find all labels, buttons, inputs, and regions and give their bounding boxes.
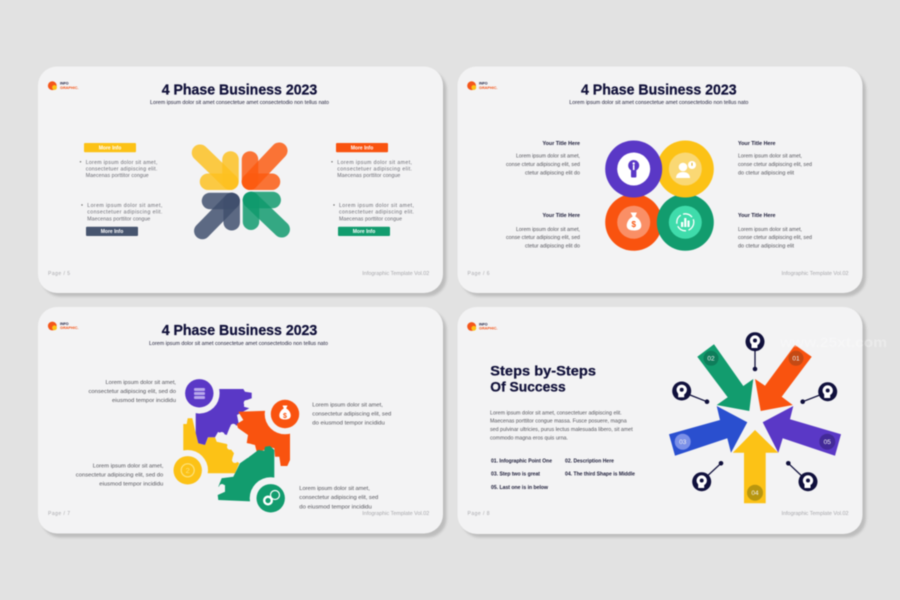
- logo: INFO: [479, 322, 488, 326]
- title: 4 Phase Business 2023: [581, 82, 737, 98]
- button: navy more info: [86, 227, 138, 236]
- text: top left: [88, 380, 177, 404]
- text: bottom right: Lorem ipsum dolor sit amet,: [299, 486, 370, 492]
- heading: Of Success: [490, 379, 566, 395]
- icon: pin top: [746, 332, 764, 371]
- footer: template name: Infographic Template Vol.02: [362, 511, 430, 517]
- text: bullet bottom left: Lorem ipsum dolor sit amet,: [87, 203, 162, 209]
- subtitle: Lorem ipsum dolor sit amet consectetue amet consectetodio non tellus nato: [149, 341, 328, 347]
- button: green more info: [338, 227, 390, 236]
- text: bottom left: [506, 213, 580, 250]
- list: points: 01. Infographic Point One: [491, 458, 552, 464]
- text: bullet bottom right: Maecenas porttitor congue: [339, 216, 402, 222]
- text: bullet bottom right: consectetuer adipiscing elit.: [339, 210, 414, 216]
- icon: pin lower right: [786, 461, 818, 491]
- button: yellow more info: More Info: [99, 146, 121, 152]
- text: bullet bottom right: Lorem ipsum dolor sit amet,: [339, 203, 414, 209]
- arrow: 05 purple: 05: [824, 439, 831, 446]
- text: top right: [738, 141, 812, 177]
- text: bottom right: consectetur adipiscing elit, sed: [299, 495, 378, 501]
- text: top left: eiusmod tempor incididu: [112, 398, 176, 404]
- piece: yellow: [183, 418, 239, 473]
- arrow: 01 orange: 01: [792, 356, 800, 363]
- title: 4 Phase Business 2023: [162, 323, 317, 339]
- button: orange more info: [336, 143, 388, 152]
- text: bullet top right: consectetuer adipiscing elit.: [337, 166, 412, 172]
- text: top left: Lorem ipsum dolor sit amet,: [106, 380, 177, 386]
- text: bullet bottom left: [81, 203, 162, 222]
- list: points: 05. Last one is in below: [491, 485, 549, 491]
- arrow: 04 yellow: [733, 430, 778, 503]
- arrow: 03 blue: 03: [679, 439, 687, 446]
- footer: page number: Page / 5: [48, 271, 70, 277]
- button: yellow more info: [84, 143, 136, 152]
- button: navy more info: More Info: [101, 229, 123, 235]
- text: description: Lorem ipsum dolor sit amet, consectetuer adipiscing elit.: [490, 410, 622, 416]
- text: bottom left: [76, 464, 164, 488]
- text: description: sed pulvinar ultricies, purus lectus malesuada libero, sit amet: [490, 427, 633, 433]
- arrow: 02 green: [697, 344, 753, 411]
- text: top right: Lorem ipsum dolor sit amet,: [312, 403, 383, 409]
- logo: [48, 322, 78, 330]
- text: top right: Lorem ipsum dolor sit amet,: [738, 154, 802, 160]
- text: bullet top left: consectetuer adipiscing elit.: [86, 166, 157, 172]
- text: bottom right: conse ctetur adipiscing elit, sed: [738, 235, 812, 241]
- icon: orange money bag: [271, 400, 299, 428]
- text: top right: consectetur adipiscing elit, sed: [312, 412, 391, 418]
- footer: page number: Page / 6: [468, 271, 490, 277]
- text: bottom right: [738, 213, 812, 250]
- heading: Steps by-Steps: [490, 363, 596, 379]
- arrow: orange: [250, 151, 279, 182]
- chart: four inward arrows: [200, 151, 282, 231]
- list: points: 04. The third Shape is Middle: [565, 472, 635, 478]
- text: top left: consectetur adipiscing elit, sed do: [88, 389, 176, 395]
- panel: slide 6 circles: [458, 66, 866, 296]
- text: top left: Lorem ipsum dolor sit amet,: [516, 154, 580, 160]
- arrow: 03 blue: [669, 406, 747, 456]
- text: top left: ctetur adipiscing elit do: [525, 171, 580, 177]
- subtitle: Lorem ipsum dolor sit amet consectetue amet consectetodio non tellus nato: [569, 100, 748, 106]
- arrow: 01 orange: [755, 345, 812, 411]
- arrow: 05 purple: [763, 406, 841, 456]
- text: bullet top left: Lorem ipsum dolor sit amet,: [86, 160, 157, 166]
- text: top left: [506, 141, 580, 177]
- text: bullet bottom right: [333, 203, 414, 222]
- text: bullet top left: Maecenas porttitor congue: [86, 173, 149, 179]
- chart: puzzle: [167, 373, 305, 519]
- logo: GRAPHIC.: [60, 326, 78, 330]
- chart: star arrows: [669, 344, 841, 503]
- circle: yellow with person: [657, 140, 714, 198]
- text: top right: conse ctetur adipiscing elit, sed: [738, 162, 812, 168]
- icon: green gears: [256, 484, 285, 512]
- circle: orange with money bag: [605, 194, 662, 251]
- footer: template name: Infographic Template Vol.02: [782, 271, 849, 277]
- logo: [467, 81, 498, 90]
- footer: template name: Infographic Template Vol.02: [782, 511, 849, 517]
- text: bottom right: Your Title Here: [738, 213, 776, 219]
- icon: pin lower left: [692, 461, 723, 491]
- text: bullet top right: Maecenas porttitor congue: [337, 173, 400, 179]
- text: description: [490, 410, 633, 442]
- logo: INFO: [60, 322, 69, 326]
- arrow: yellow: [200, 153, 230, 182]
- text: bullet bottom left: Maecenas porttitor congue: [87, 216, 150, 222]
- text: bottom left: eiusmod tempor incididu: [99, 482, 163, 488]
- text: top left: Your Title Here: [542, 141, 580, 147]
- text: bullet top right: Lorem ipsum dolor sit amet,: [337, 160, 412, 166]
- heading: [490, 363, 596, 395]
- text: bottom left: conse ctetur adipiscing elit, sed: [506, 235, 580, 241]
- text: description: Maecenas porttitor congue massa. Fusce posuere, magna: [490, 418, 627, 424]
- list: points: [491, 458, 635, 491]
- text: description: commodo magna eros quis urna.: [490, 436, 568, 442]
- arrow: navy: [202, 201, 232, 231]
- footer: page number: Page / 7: [48, 511, 70, 517]
- watermark: www.25xt.com: [779, 334, 887, 350]
- logo: [467, 322, 498, 331]
- text: bottom left: Your Title Here: [542, 213, 580, 219]
- arrow: green: [251, 200, 282, 229]
- text: top right: [312, 403, 391, 427]
- logo: GRAPHIC.: [60, 86, 78, 90]
- circle: purple with lightbulb: [605, 140, 662, 198]
- piece: purple: [196, 389, 252, 445]
- button: orange more info: More Info: [351, 146, 373, 152]
- text: bottom left: ctetur adipiscing elit do: [525, 244, 580, 250]
- list: points: 02. Description Here: [565, 458, 614, 464]
- footer: template name: Infographic Template Vol.02: [362, 271, 430, 277]
- panel: slide 7 puzzle: [38, 307, 446, 538]
- text: bottom left: Lorem ipsum dolor sit amet,: [516, 227, 580, 233]
- logo: [48, 81, 78, 90]
- piece: green: [218, 446, 274, 502]
- panel: slide 5 arrows: [38, 66, 446, 296]
- icon: orange money bag: $: [283, 413, 287, 420]
- text: top right: do ctetur adipiscing elit: [738, 171, 795, 177]
- logo: INFO: [479, 82, 488, 86]
- arrow: 02 green: 02: [707, 356, 715, 363]
- text: bottom right: do ctetur adipiscing elit: [738, 244, 795, 250]
- text: bottom right: Lorem ipsum dolor sit amet,: [738, 227, 802, 233]
- icon: purple stack: [185, 379, 214, 407]
- icon: yellow cycle: 2: [186, 466, 190, 475]
- icon: yellow cycle: [174, 456, 202, 484]
- text: bullet bottom left: consectetuer adipiscing elit.: [87, 210, 162, 216]
- text: top right: Your Title Here: [738, 141, 776, 147]
- text: bottom right: do eiusmod tempor incididu: [299, 505, 372, 511]
- subtitle: Lorem ipsum dolor sit amet consectetue amet consectetodio non tellus nato: [150, 100, 329, 106]
- footer: page number: Page / 8: [468, 511, 490, 517]
- text: top right: do eiusmod tempor incididu: [312, 421, 385, 427]
- text: bottom left: consectetur adipiscing elit, sed do: [76, 473, 163, 479]
- piece: orange: [237, 410, 290, 466]
- panel: slide 8 steps: [458, 307, 887, 538]
- text: bottom right: [299, 486, 378, 511]
- circle: orange with money bag: $: [631, 220, 636, 229]
- icon: pin left: [672, 382, 709, 404]
- text: bullet top left: [80, 160, 157, 179]
- logo: GRAPHIC.: [479, 86, 498, 90]
- title: 4 Phase Business 2023: [162, 82, 317, 98]
- text: top left: conse ctetur adipiscing elit, sed: [506, 162, 580, 168]
- text: bullet top right: [331, 160, 412, 179]
- icon: pin right: [800, 382, 837, 404]
- arrow: 04 yellow: 04: [751, 490, 759, 497]
- button: green more info: More Info: [353, 229, 375, 235]
- logo: GRAPHIC.: [479, 327, 498, 331]
- text: bottom left: Lorem ipsum dolor sit amet,: [93, 464, 164, 470]
- list: points: 03. Step two is great: [491, 472, 540, 478]
- circle: green with chart: [657, 194, 714, 251]
- logo: INFO: [60, 82, 69, 86]
